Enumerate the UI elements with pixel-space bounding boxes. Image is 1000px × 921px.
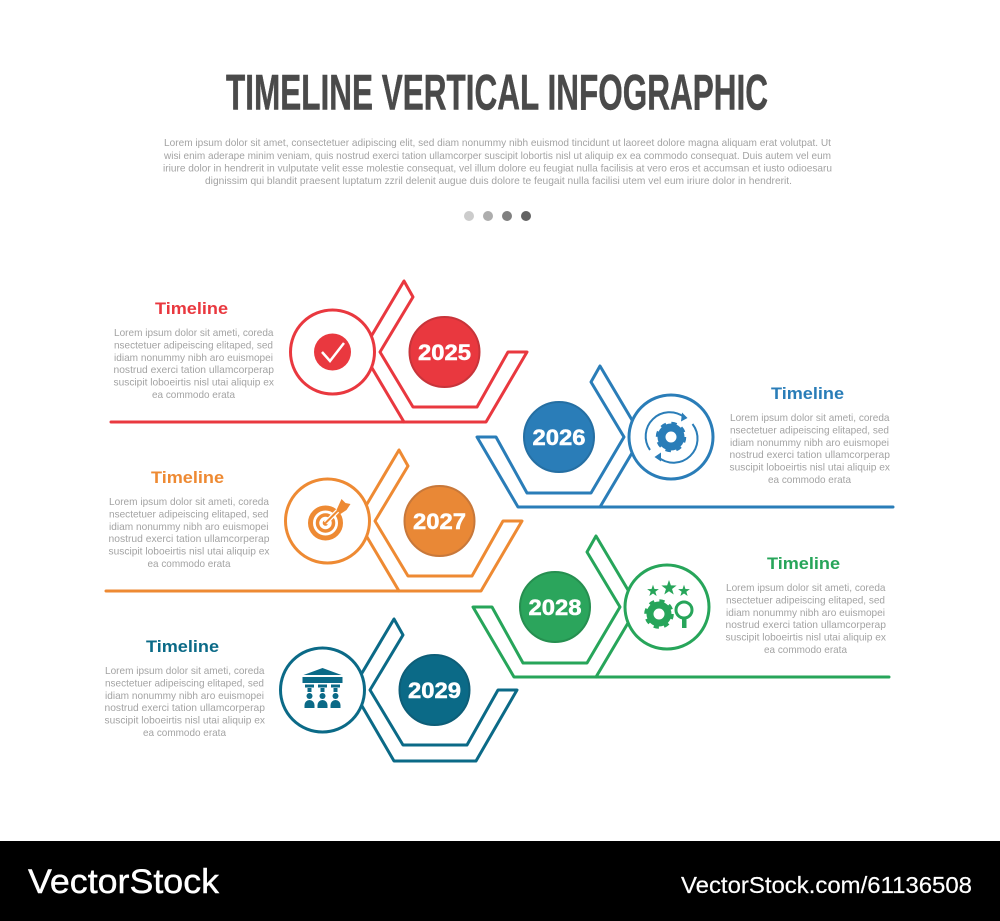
footer brand: VectorStock (28, 863, 220, 901)
text block: idiam nonummy nibh aro euismopei (726, 607, 885, 619)
panel: 2029 teal (104, 619, 517, 761)
icon: target with arrow (286, 479, 370, 563)
icon: stars, gear and magnifier (625, 565, 709, 649)
outline arrow (473, 536, 889, 677)
text block: idiam nonummy nibh aro euismopei (114, 352, 273, 364)
intro text block: wisi enim aderape minim veniam, quis nostrud exerci tation ullamcorper suscipit lobortis nisl ut aliquip ex ea commodo consequat. Duis autem vel eum (163, 150, 831, 162)
text block: Lorem ipsum dolor sit ameti, coreda (726, 582, 886, 594)
text block (726, 582, 887, 656)
text block: nsectetuer adipeiscing elitaped, sed (726, 594, 885, 606)
footer bar (0, 841, 1000, 921)
text block: Lorem ipsum dolor sit ameti, coreda (114, 327, 274, 339)
year badge 2026: 2026 (532, 425, 586, 450)
text block: nsectetuer adipeiscing elitaped, sed (105, 678, 264, 690)
year badge 2028 (520, 572, 590, 642)
text block: nostrud exerci tation ullamcorperap (108, 533, 270, 545)
text block: nsectetuer adipeiscing elitaped, sed (109, 508, 269, 520)
heading: Timeline (151, 468, 224, 487)
text block: suscipit loboeirtis nisl utai aliquip ex (726, 632, 887, 644)
text block: ea commodo erata (152, 389, 235, 401)
text block (730, 412, 891, 486)
intro text block: Lorem ipsum dolor sit amet, consectetuer adipiscing elit, sed diam nonummy nibh euismod tincidunt ut laoreet dolore magna aliquam erat volutpat. Ut (164, 137, 831, 149)
year badge 2027 (404, 486, 474, 556)
text block: suscipit loboeirtis nisl utai aliquip ex (108, 546, 270, 558)
outline arrow (477, 366, 893, 507)
text block: nsectetuer adipeiscing elitaped, sed (730, 424, 889, 436)
outline arrow (111, 281, 527, 422)
icon: gear with cycle arrows (629, 395, 713, 479)
year badge 2026 (524, 402, 594, 472)
text block: ea commodo erata (148, 558, 231, 570)
text block: nsectetuer adipeiscing elitaped, sed (114, 340, 273, 352)
year badge 2029: 2029 (408, 678, 461, 703)
text block: nostrud exerci tation ullamcorperap (730, 449, 890, 461)
text block: Lorem ipsum dolor sit ameti, coreda (109, 496, 269, 508)
icon: pillared building with people (280, 648, 364, 732)
text block: idiam nonummy nibh aro euismopei (109, 521, 268, 533)
panel: 2028 green (473, 536, 889, 677)
year badge 2027: 2027 (413, 509, 466, 534)
text block: idiam nonummy nibh aro euismopei (730, 437, 889, 449)
pagination dots (464, 211, 531, 221)
year badge 2028: 2028 (528, 595, 582, 620)
text block: Lorem ipsum dolor sit ameti, coreda (730, 412, 890, 424)
text block: nostrud exerci tation ullamcorperap (726, 619, 886, 631)
year badge 2029 (400, 655, 470, 725)
text block (114, 327, 275, 401)
icon: check (290, 310, 374, 394)
heading: Timeline (146, 637, 219, 656)
year badge 2025 (410, 317, 480, 387)
text block: suscipit loboeirtis nisl utai aliquip ex (114, 376, 275, 388)
text block: ea commodo erata (764, 644, 847, 656)
intro text block (163, 137, 832, 187)
year badge 2025: 2025 (418, 340, 471, 365)
text block: idiam nonummy nibh aro euismopei (105, 690, 264, 702)
panel: 2027 orange (106, 450, 522, 591)
outline arrow (106, 450, 522, 591)
panel: 2025 red (111, 281, 527, 422)
text block: ea commodo erata (143, 727, 226, 739)
text block (108, 496, 270, 570)
intro text block: dignissim qui blandit praesent luptatum zzril delenit augue duis dolore te feugait nulla facilisi utem vel eum iriure dolor in hendrerit. (205, 175, 792, 187)
outline arrow (362, 619, 517, 761)
heading: Timeline (155, 299, 228, 318)
text block: Lorem ipsum dolor sit ameti, coreda (105, 665, 265, 677)
footer image id: VectorStock.com/61136508 (681, 872, 972, 898)
text block: nostrud exerci tation ullamcorperap (114, 364, 274, 376)
intro text block: iriure dolor in hendrerit in vulputate velit esse molestie consequat, vel illum dolore eu feugiat nulla facilisis at vero eros et accumsan et iusto odioesaru (163, 162, 832, 174)
text block: nostrud exerci tation ullamcorperap (104, 702, 265, 714)
text block: suscipit loboeirtis nisl utai aliquip ex (104, 714, 266, 726)
text block (104, 665, 266, 739)
heading: Timeline (771, 384, 844, 403)
text block: ea commodo erata (768, 474, 851, 486)
text block: suscipit loboeirtis nisl utai aliquip ex (730, 462, 891, 474)
heading: Timeline (767, 554, 840, 573)
panel: 2026 blue (477, 366, 893, 507)
